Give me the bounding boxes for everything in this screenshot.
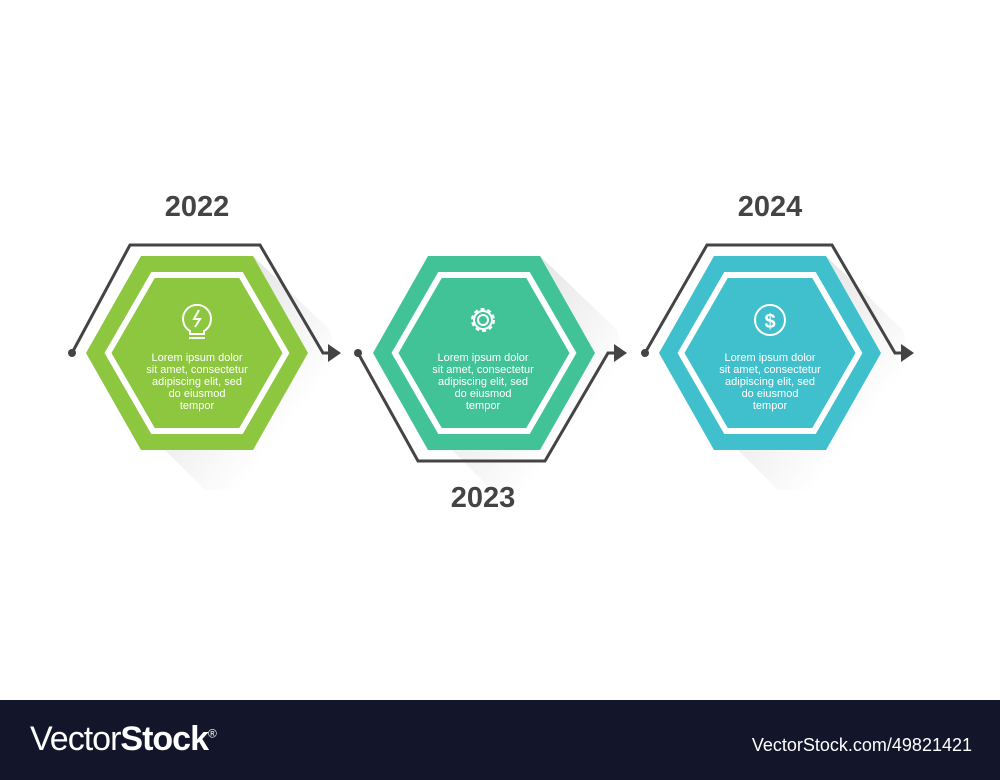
year 2024: 2024 bbox=[738, 191, 802, 223]
panel: 2023: do eiusmod bbox=[455, 388, 511, 400]
text block: tempor bbox=[180, 400, 214, 412]
panel: 2023: tempor bbox=[466, 400, 500, 412]
text block: do eiusmod bbox=[169, 388, 225, 400]
text block: sit amet, consectetur bbox=[146, 364, 248, 376]
panel: 2023 bbox=[354, 256, 637, 514]
text block: adipiscing elit, sed bbox=[152, 376, 242, 388]
icon: dollar bbox=[755, 305, 785, 335]
panel: 2024: tempor bbox=[753, 400, 787, 412]
year 2023: 2023 bbox=[451, 482, 515, 514]
panel: 2023: sit amet, consectetur bbox=[432, 364, 534, 376]
icon: lightbulb bbox=[183, 305, 211, 338]
panel: 2023: Lorem ipsum dolor bbox=[437, 352, 529, 364]
connector line 3 bbox=[641, 245, 914, 362]
logo: VectorStock® bbox=[30, 720, 216, 758]
shadow bbox=[165, 256, 350, 490]
panel: 2024: Lorem ipsum dolor bbox=[724, 352, 816, 364]
text block: Lorem ipsum dolor bbox=[151, 352, 243, 364]
icon: dollar: $ bbox=[764, 311, 776, 333]
image id: VectorStock.com/49821421 bbox=[752, 735, 972, 755]
panel: 2024: do eiusmod bbox=[742, 388, 798, 400]
icon: gear bbox=[472, 309, 494, 331]
panel: 2024 bbox=[641, 191, 923, 490]
connector line 2 bbox=[354, 344, 627, 461]
connector line 1 bbox=[68, 245, 341, 362]
year 2022: 2022 bbox=[165, 191, 229, 223]
footer bbox=[0, 700, 1000, 780]
panel: 2024: adipiscing elit, sed bbox=[725, 376, 815, 388]
panel: 2022 bbox=[68, 191, 350, 490]
panel: 2024: sit amet, consectetur bbox=[719, 364, 821, 376]
panel: 2023: adipiscing elit, sed bbox=[438, 376, 528, 388]
